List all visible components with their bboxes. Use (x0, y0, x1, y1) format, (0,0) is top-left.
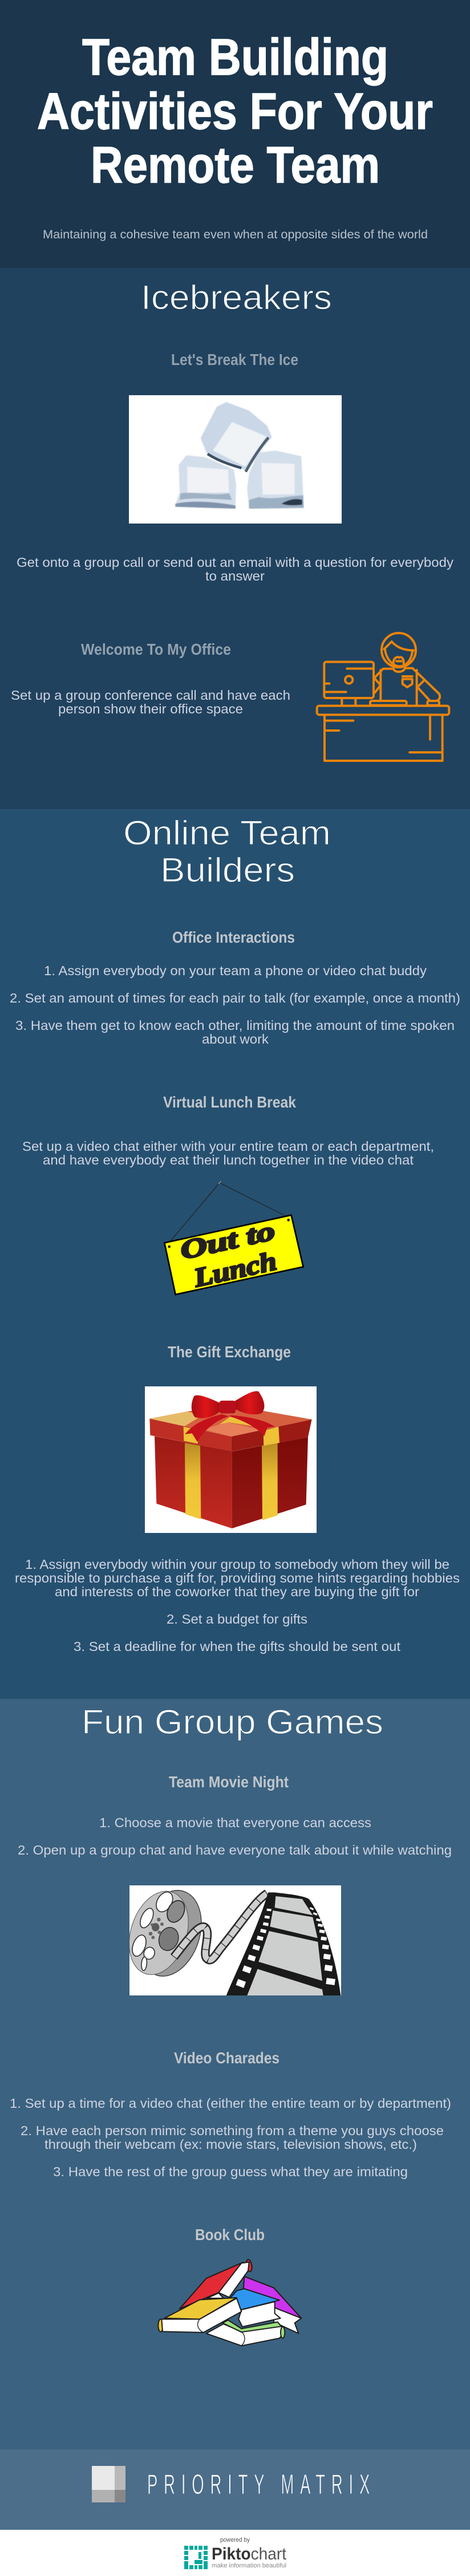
list: video charades steps: 1. Set up a time for a video chat (either the entire team or by department) (10, 2096, 451, 2111)
text: video chat lunch: and have everybody eat their lunch together in the video chat (43, 1153, 414, 1167)
list: gift exchange steps (15, 1557, 460, 1654)
text: office space: Set up a group conference call and have each (11, 688, 290, 703)
list: video charades steps: 2. Have each person mimic something from a theme you guys choose (21, 2123, 444, 2138)
image: gift box (145, 1386, 317, 1533)
panel: fun group games (0, 1699, 470, 2449)
heading: Book Club: Book Club (195, 2226, 265, 2244)
list: office interactions steps: 1. Assign everybody on your team a phone or video chat buddy (44, 963, 427, 978)
text: group call question (17, 555, 454, 583)
image: out to lunch sign (164, 1181, 303, 1295)
list: gift exchange steps: 3. Set a deadline for when the gifts should be sent out (74, 1639, 401, 1654)
section heading: Fun Group Games: Fun Group Games (82, 1703, 383, 1741)
image: ice cubes (129, 395, 342, 524)
text: video chat lunch: Set up a video chat either with your entire team or each department, (22, 1139, 434, 1154)
text: group call question: to answer (205, 569, 265, 583)
list: office interactions steps: 3. Have them get to know each other, limiting the amount of time spoken (15, 1018, 455, 1033)
section heading: Online Team Builders: Online Team (123, 814, 331, 852)
list: movie night steps: 2. Open up a group chat and have everyone talk about it while watching (18, 1843, 452, 1857)
subtitle: Maintaining a cohesive team even when at opposite sides of the world (43, 228, 428, 241)
text: powered by: powered by (220, 2537, 250, 2543)
heading: Virtual Lunch Break: Virtual Lunch Break (163, 1093, 296, 1111)
heading: Team Movie Night: Team Movie Night (169, 1773, 289, 1791)
section heading: Online Team Builders (123, 814, 331, 889)
icon: person at office desk (317, 633, 449, 761)
section heading: Icebreakers: Icebreakers (141, 278, 332, 317)
list: movie night steps: 1. Choose a movie that everyone can access (99, 1815, 371, 1830)
list: video charades steps: through their webcam (ex: movie stars, television shows, etc.) (44, 2137, 417, 2152)
image: stack of books (158, 2259, 301, 2346)
panel: footer logo band (0, 2449, 470, 2530)
list: gift exchange steps: 1. Assign everybody within your group to somebody whom they will be (25, 1557, 449, 1572)
list: gift exchange steps: and interests of the coworker that they are buying the gift for (55, 1584, 419, 1599)
title: Team Building (82, 29, 388, 86)
heading: Office Interactions: Office Interactions (172, 928, 295, 946)
section heading: Online Team Builders: Builders (160, 851, 295, 889)
list: office interactions steps: about work (202, 1032, 269, 1046)
image: film reel (119, 1882, 341, 1995)
list: office interactions steps (10, 963, 460, 1046)
icon: piktochart mark (184, 2546, 208, 2569)
panel: online team builders (0, 809, 470, 1699)
list: office interactions steps: 2. Set an amount of times for each pair to talk (for example, once a month) (10, 991, 460, 1005)
heading: Video Charades: Video Charades (174, 2049, 279, 2067)
text: office space (11, 688, 290, 716)
text: make information beautiful: make information beautiful (212, 2562, 286, 2569)
text: office space: person show their office space (58, 701, 243, 716)
list: video charades steps (10, 2096, 451, 2179)
list: video charades steps: 3. Have the rest of the group guess what they are imitating (53, 2164, 408, 2179)
panel: icebreakers (0, 268, 470, 809)
image: out to lunch sign: Lunch (191, 1246, 279, 1293)
list: gift exchange steps: 2. Set a budget for gifts (167, 1612, 307, 1626)
list: movie night steps (18, 1815, 452, 1857)
text: piktochart wordmark: Piktochart (212, 2545, 287, 2563)
panel: header (0, 0, 470, 268)
title: Remote Team (91, 137, 380, 194)
image: out to lunch sign: Out to (177, 1216, 278, 1265)
heading: The Gift Exchange: The Gift Exchange (168, 1343, 291, 1361)
title (37, 29, 433, 194)
heading: Welcome To My Office: Welcome To My Office (81, 640, 231, 658)
logo: priority matrix squares (92, 2466, 125, 2502)
text: video chat lunch (22, 1139, 434, 1167)
logo text: PRIORITY MATRIX (147, 2469, 370, 2500)
list: gift exchange steps: responsible to purchase a gift for, providing some hints regarding hobbies (15, 1571, 460, 1585)
text: group call question: Get onto a group call or send out an email with a question for everybody (17, 555, 454, 570)
heading: Let's Break The Ice: Let's Break The Ice (171, 351, 298, 368)
panel: piktochart credit (0, 2530, 470, 2576)
